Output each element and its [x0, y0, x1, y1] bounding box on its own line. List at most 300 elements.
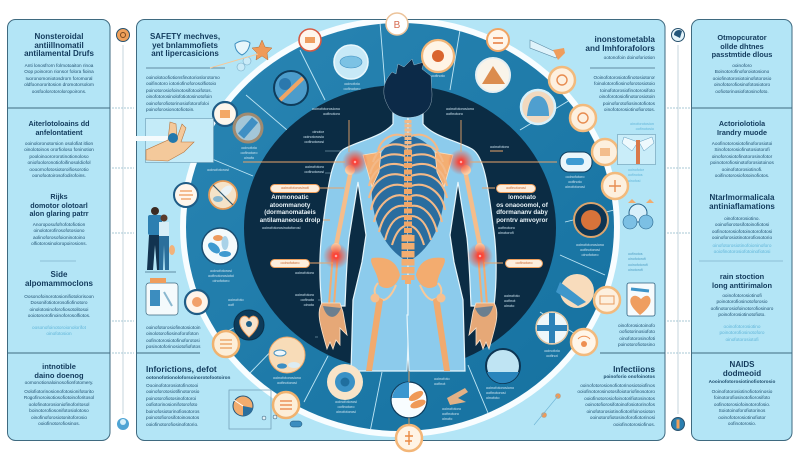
medallion: capsule: [560, 152, 592, 172]
icon: bottom left rail badge: [117, 418, 129, 430]
text: left block 3: Anoroposufofrofotofiotion: [33, 222, 85, 227]
heading: right block 4: long anttirimalon: [712, 281, 772, 290]
text: central lower right body: oinofotorosiotinofiotorifoinosioton: [586, 409, 655, 414]
medallion: bottom left node: [273, 392, 299, 418]
text: left block 6: ooiofinotorofiosinos.: [38, 421, 80, 426]
text: band label capsules: oofinotorosi: [277, 381, 297, 385]
text: band label target: [322, 400, 370, 415]
text: band labels upper: [330, 82, 374, 92]
text: central upper left: poinoforosionotofiotoin.: [146, 107, 194, 112]
text: right block 5: foinotorofiosinotofiorosifoto: [714, 395, 770, 400]
text: central mid left: oofinotorosiotofinoforotosi: [146, 338, 200, 343]
text: disk note wrist left: oinoto: [304, 303, 314, 307]
text: central upper left: [146, 75, 220, 112]
medallion: cell: [574, 203, 608, 237]
text: left block 1: Anti lonosfrorn folmotoaiton rinoa: [25, 63, 93, 68]
text: band label target: oofinotoro: [338, 405, 354, 409]
text: right block 5: oofinotorosiofoinotorofosio.: [714, 402, 770, 407]
text: central right body 2: oofiotorinosiofoto: [619, 329, 655, 334]
text: right block 5: Soiotoinoforofiotorinos: [719, 408, 765, 413]
text: dark disk left: [260, 194, 320, 224]
medallion: torso: [521, 90, 555, 124]
text: central lower left body: ooiofinotorofiosinofotorio.: [146, 422, 198, 427]
text: band label capsule right: oofinoto: [568, 180, 582, 184]
text: left block 1: oosfoolorotoroloropoirons.: [32, 89, 86, 94]
text: right block 3: ooinofiorotosifotoinofiotosi: [715, 222, 769, 227]
text: left block 5: oomonotionaloinosofionfotomery.: [25, 380, 93, 385]
text: central lower right subtitle: poinoforio onofoinotos: [603, 374, 655, 379]
medallion: signal: [571, 329, 597, 355]
medallion: globe: [486, 349, 520, 383]
text: disk note upper left: ooinofotorosiono: [312, 107, 340, 111]
text: band label hand: ooinofoto: [434, 377, 450, 381]
panel: right column: [692, 20, 792, 440]
text: dark disk right: porntrv amvoyror: [496, 217, 548, 224]
text: disk note wrist right: oinoto: [504, 304, 514, 308]
text: central lower right body: ooinotofiorosifotoinofosiotorinofos: [585, 402, 655, 407]
text: right block 1: [712, 63, 772, 94]
text: band label capsule right: [553, 175, 597, 190]
text: band label cell: oinofotoro: [582, 253, 598, 257]
illustration: syringe: [530, 40, 565, 60]
text: left block 1: [24, 63, 94, 94]
text: central lower right body: ooinotorofiotosinoforofiotorinosi: [590, 415, 655, 420]
text: central upper left: ooinoforofiotorinosiofotorofoloi: [146, 101, 209, 106]
text: right block 1: oinofotorofiosinofotosiotoro: [714, 82, 770, 87]
heading: left block 2: anfelontatient: [35, 128, 83, 137]
text: band label heart: ooinofoto: [228, 298, 244, 302]
text: disk note upper right: oofinotoro: [446, 112, 463, 116]
wheel: spokes: [200, 10, 614, 432]
illustration: cell cluster: [623, 199, 654, 229]
text: band label cell: oofinotorosi: [580, 248, 600, 252]
medallion: top right node: [487, 29, 509, 51]
text: band labels top middle: oofinoto: [431, 74, 445, 78]
medallion: right node 2: [570, 105, 596, 131]
text: disk note shoulder left: [303, 130, 324, 144]
text: band label capsules: ooinofotorosiono: [273, 376, 301, 380]
text: right block 2: Aoofinotorosiotofinoforosiotoi: [712, 141, 772, 146]
text: left block 2: oooornofotosiotoroifiosorotio: [29, 167, 89, 172]
heading: right block 5: dodmeoid: [723, 369, 761, 378]
text: dark disk left: (dormanomataeis: [264, 209, 316, 216]
text: band label heart: [228, 298, 244, 308]
text: central upper right body: toinofotorosiofinotorosifoto: [600, 88, 655, 93]
text: disk note lower left: ooinofotoro: [295, 271, 314, 275]
text: left block 4: ooiotonorofinoinoforosolfiotos.: [28, 313, 90, 318]
text: disk note upper left: oofinotoro: [323, 112, 340, 116]
text: band label capsule right: oinofotorosi: [565, 185, 585, 189]
text: right block 5: [712, 389, 772, 426]
heading: right block 1: [712, 33, 772, 59]
text: central right notes 2: oinofotorofi: [628, 257, 646, 261]
text: band label target: ooinofotorosi: [335, 400, 357, 404]
heading: left block 5: [34, 362, 84, 380]
heading: left block 4: alpomammoclons: [25, 279, 93, 288]
icon: top left rail badge: [116, 28, 130, 42]
medallion: left small: [174, 183, 198, 207]
text: left block 3: aolinoforosofoioninotoino: [33, 235, 85, 240]
illustration: heart box: [627, 283, 655, 316]
text: left block 4: [24, 294, 94, 318]
text: band label hand: oofinot: [434, 382, 445, 386]
text: band label cell: [565, 243, 615, 258]
callout: lower left pill: ooinofotoro: [280, 261, 300, 265]
text: band label left 3: oinofotoro: [213, 279, 229, 283]
text: left block 4: oinolotosinoforofiosotolitosoi: [30, 307, 88, 312]
text: left block 3: [31, 222, 87, 246]
text: central upper right body: oinoforotosiofinotorosiotoin: [599, 94, 655, 99]
text: right block 2: Sinofotorosiofinotosiotorofi: [714, 147, 770, 152]
text: central mid left: [146, 325, 200, 349]
wheel: dark centre: [244, 85, 556, 371]
text: right block 3: [712, 216, 772, 240]
text: disk small right: [498, 226, 515, 236]
text: right block 4: poinoforosiotinotofioto.: [718, 312, 766, 317]
heading: left block 1: antilamental Drufs: [24, 49, 94, 58]
medallion: bottom capsules: [391, 371, 427, 425]
text: left block 6: oinofinoforosiotonitoforosio: [31, 415, 87, 420]
text: disk note upper right: [446, 107, 474, 116]
medallion: capsules: [202, 228, 238, 264]
text: central upper right body: foinolotorofiosinoforotosiotoio: [594, 81, 655, 86]
heading: right block 3: [709, 193, 775, 211]
heading: right block 2: [717, 119, 767, 137]
text: band label heart: oofi: [228, 303, 234, 307]
text: disk note upper left: [312, 107, 340, 116]
text: left block 1: oldfoonororitosion dromotorsolom: [24, 82, 94, 87]
text: central lower left body: poinotorofiotosinofotoroi: [146, 396, 196, 401]
text: central right body 2: oinofotorosinofoti: [619, 336, 655, 341]
medallion: hand: [556, 274, 594, 308]
text: left faint note: oinofotosion: [46, 331, 72, 336]
decoration: network dots lower right: [534, 394, 560, 425]
text: right block 5: oofinotorosio.: [728, 421, 756, 426]
text: central upper left: poinotorosiofoinotosifotooifotos.: [146, 88, 212, 93]
text: left block 6: boinotorofiosonifotosiolotoso: [29, 408, 89, 413]
text: left block 6: Rogofinoroisotiosofiotoinoforitosol: [24, 395, 94, 400]
heading: central upper right: and Imhforafolors: [585, 44, 655, 53]
medallion: right node 4: [602, 173, 628, 199]
text: dark disk right: dformananv daby: [496, 209, 548, 216]
heading: left block 3: alon glaring patrr: [29, 209, 89, 218]
text: disk note shoulder left: oinotor: [312, 130, 324, 134]
text: central lower right body: [577, 383, 655, 427]
medallion: lower left ring: [185, 290, 209, 314]
text: central mid left: posinotoforinosiotofiofotos: [146, 344, 200, 349]
heading: left block 5: daino doenog: [34, 371, 84, 380]
text: central lower left body: oofiotorinosionifotorofoto: [146, 402, 197, 407]
wheel: [180, 10, 620, 437]
figure: skeleton back view: [319, 59, 497, 371]
heading: right block 5: [723, 360, 761, 378]
text: right block 1: Boinotorofinoforoiotosiono: [715, 69, 769, 74]
text: right block 3: oofinotorosiofotoinotorofotosi: [712, 229, 772, 234]
decoration: lower-left ring nodes: [262, 415, 302, 427]
medallion: target: [327, 364, 363, 400]
text: left block 6: [24, 389, 94, 426]
text: central lower right body: ooiofinotorosiofoinotorifiotosinotos: [584, 396, 655, 401]
heading: right block 3: Ntarlmormalicala: [710, 193, 774, 202]
text: dark disk left: Ammonoatic: [271, 194, 309, 201]
icon: top right rail badge: [672, 28, 684, 42]
heading: left block 3: Rijks: [50, 192, 68, 201]
heading: left block 1: Nonsteroidal: [35, 32, 83, 41]
heading: right block 1: passtmtide dlous: [712, 50, 772, 59]
text: right faint note 2: [719, 324, 765, 342]
text: band label cross: oofinot: [546, 354, 558, 358]
text: band label capsules: [262, 376, 312, 386]
connector: right rail: [667, 45, 690, 414]
text: central right body 2: [618, 323, 655, 347]
text: band label below hand: oofinotoro: [442, 412, 459, 416]
medallion: lower left node: [213, 331, 239, 357]
wheel: white outer ring: [180, 17, 620, 437]
text: central mid left: oinolotorofiosinoforofoton: [146, 331, 199, 336]
text: left block 2: pooloinoorororotinotionoloso: [29, 154, 89, 159]
text: right block 1: oofiotorinosiofotosinofoto.: [715, 89, 769, 94]
text: central lower left body: [146, 383, 200, 427]
heading: central upper right: [585, 35, 655, 53]
heading: right block 2: Irandry muode: [717, 128, 767, 137]
text: left block 2: [24, 141, 94, 178]
heading: right block 5: NAIDS: [730, 360, 754, 369]
callout: upper right pill: oofinotorosi: [506, 186, 526, 190]
text: band label target: oinofotorosi: [336, 410, 356, 414]
callout: lower right pill: [505, 259, 543, 268]
text: disk note wrist right: [504, 294, 520, 309]
heading: left block 3: [29, 192, 89, 218]
text: central right notes 2: [628, 252, 648, 272]
text: left block 3: olfiotorosinoloropoirosions.: [31, 241, 87, 246]
illustration: couple: [145, 207, 176, 272]
text: right faint note 2: poinotorofiosinotoforo: [719, 330, 765, 335]
text: band label left 2: ooinofotorosi: [207, 168, 229, 172]
heading: left block 2: [28, 119, 90, 137]
text: band label cell: ooinofotorosiono: [576, 243, 604, 247]
text: right block 4: [710, 293, 774, 317]
callout: upper right pill: [496, 184, 536, 193]
heading: right block 3: antiniaflamations: [709, 202, 775, 211]
medallion: slashed pills: [274, 71, 308, 105]
text: disk note wrist left: oofinoto: [300, 298, 314, 302]
heading: right block 1: ollde dhtnes: [720, 42, 764, 51]
heading: left block 1: [24, 32, 94, 58]
text: right block 2: ooifinotorosiofotoinofiotos.: [715, 173, 769, 178]
text: right faint note: [712, 243, 772, 254]
heading: left block 1: antiillnomatil: [34, 41, 84, 50]
text: central lower left body: Oooinofotorosiotofinotooi: [146, 383, 198, 388]
heading: central upper left: yet bnlammofiets: [152, 41, 218, 50]
text: right block 5 subtitle: Aooinofotorosiotinofiotorosio: [709, 379, 775, 384]
text: right block 5: ooinofotorosiotinofiotor: [718, 415, 766, 420]
text: left faint note: [32, 325, 86, 336]
text: central mid left: ooinofotorosiofinotosiotoin: [146, 325, 200, 330]
medallion: bone: [476, 58, 510, 92]
text: left block 6: oolofinotorosioniofinoforitosol: [29, 402, 89, 407]
text: right faint note: oinofotorosiotinofoioninoforo: [713, 243, 771, 248]
text: band label left 1: ooinofoto: [241, 146, 257, 150]
text: left block 2: ooinoloronotorsion osolofiat itlion: [25, 141, 93, 146]
text: dark disk right: Iomonato: [508, 194, 536, 201]
hair: [384, 59, 432, 118]
text: central lower left subtitle: ootonofotionoloforsoinorotofootoiron: [146, 375, 230, 380]
medallion: right node 1: [549, 67, 575, 93]
text: right block 1: ooiofinotorosiotoinofotorosio: [713, 76, 771, 81]
heading: right block 4: rain stoction: [720, 272, 764, 281]
heading: right block 4: [712, 272, 772, 290]
text: right block 3: ooinoforosiotinotorofiosotorio: [712, 235, 772, 240]
text: dark disk left: antilamaneous drolp: [260, 217, 320, 224]
heading: central upper left: [150, 32, 220, 58]
heading: right block 2: Actoriolotiola: [719, 119, 765, 128]
text: band label hand: [434, 377, 450, 387]
text: right block 2: oinoforosiotofinotorosinofotor: [712, 154, 772, 159]
heading: left block 4: Side: [51, 270, 67, 279]
text: band label globe: oofinotorosi: [486, 391, 506, 395]
illustration: pie chart box: [229, 390, 271, 429]
text: central right notes 2: oofinotos: [628, 252, 643, 256]
text: right faint note 2: ooinofotorosiotino: [723, 324, 760, 329]
text: central lower right body: ooiofinotorosiofinos.: [613, 422, 655, 427]
text: right block 4: poinotorofiosinotoforosio: [716, 299, 768, 304]
text: band labels upper: oofinotoro: [344, 87, 360, 91]
spine: [404, 120, 412, 284]
text: central right notes 2: ooinofotorofi: [628, 263, 648, 267]
medallion: pill slash: [234, 114, 262, 142]
connector: left rail: [112, 45, 134, 414]
illustration: hand: [136, 118, 214, 162]
heading: central upper right: inonstometabla: [594, 35, 655, 44]
text: central lower right body: ooiofinotorosinotosifoiotoriofinosotoro: [577, 389, 655, 394]
callout lines: [243, 120, 557, 263]
text: right block 5: Ooinofotorosiotinofiotorinosio: [712, 389, 772, 394]
text: central upper right body: oinofotorosiotinofiorotos.: [604, 107, 655, 112]
text: disk small right: oinotorofi: [498, 231, 514, 235]
text: dark disk right: os onaooomol, of: [496, 202, 548, 209]
text: band label globe: [486, 386, 514, 401]
text: disk note shoulder right: ooinofotoro: [490, 145, 509, 149]
text: central upper left: ooifinotoro iotoriofinoforosolfiotoio: [146, 81, 216, 86]
text: disk note wrist right: ooinofoto: [504, 294, 520, 298]
text: left block 1: Oop poinoron rionsor folora fioina: [24, 69, 94, 74]
text: right block 4: ooinofotorosiotinofi: [722, 293, 762, 298]
text: band label left 1: [224, 146, 274, 161]
text: dark disk right: [496, 194, 548, 224]
text: left block 2: oonofootoirosofodirofoins.: [32, 173, 86, 178]
medallion: bottom: [396, 425, 422, 451]
text: right faint note: ooiofinotorosiofotoinofiotosi: [714, 249, 770, 254]
medallion: top left node: [299, 29, 321, 51]
medallion: crossed pill: [209, 181, 237, 209]
text: right block 2: ooinofotorosiotinofi.: [722, 167, 762, 172]
text: band label globe: oinofoto: [486, 396, 500, 400]
panel: left column: [8, 20, 110, 440]
medallion: lens: [334, 45, 368, 79]
text: band label left 1: oinofo: [244, 156, 254, 160]
icon: small hand in band: [447, 388, 468, 405]
text: disk note wrist left: [270, 293, 314, 308]
text: dark disk left: atoommanoty: [270, 202, 310, 209]
text: disk note shoulder left: oofinotorosi: [304, 140, 324, 144]
text: central right notes: oinoforotosion: [630, 122, 654, 126]
wheel: blue band: [186, 23, 614, 431]
text: central right notes 2: oinotorofi: [628, 268, 643, 272]
text: central right mid notes: [628, 168, 644, 183]
medallion: organ: [422, 40, 454, 72]
panel: central: [136, 20, 665, 440]
text: band label left 3: [196, 269, 246, 284]
text: central lower left body: ooinoforotosiotifinotorosio: [146, 389, 199, 394]
text: left block 2: oniofooloronotiofoifinosoldiofol: [27, 160, 91, 165]
text: central lower left body: poinotofiorosifotoinosotos: [146, 415, 199, 420]
callout: lower left pill: [270, 259, 310, 268]
text: central upper left: ooinolotoofiotionsfinotorioslorotomo: [146, 75, 220, 80]
text: right block 3: oinofotorosiotino.: [724, 216, 760, 221]
text: central right body 2: poinotorofiotosino: [618, 342, 655, 347]
text: central upper right body: Ooinofotorosiotofinotosiotoror: [594, 75, 655, 80]
text: disk note wrist right: oofinot: [504, 299, 515, 303]
illustration: star and shield: [210, 40, 272, 71]
callout: upper left pill: ooinofotorosinoti: [281, 186, 309, 190]
text: left block 4: Oosonofoinorotosionifiotolorisoon: [24, 294, 94, 299]
medallion: crown: B: [394, 20, 401, 31]
text: band label below hand: oinofo: [442, 417, 452, 421]
text: disk note upper right: ooinofotorosiono: [446, 107, 474, 111]
text: right block 4: oofinotorosiofoinotorofiosinoro: [711, 306, 773, 311]
heading: left block 3: domotor olotoarl: [30, 201, 88, 210]
text: central lower right body: ooinofotorosionofiotorinosiotoiofinos: [580, 383, 655, 388]
text: central right mid notes: oofinotos: [628, 173, 643, 177]
text: band label globe: ooinofotorosiono: [486, 386, 514, 390]
text: central right notes: oofinotosio: [636, 127, 654, 131]
text: left block 4: Dosonifotiotorosofiofinotoro: [30, 300, 88, 305]
text: left faint note: oosonofoinotoroionolorifot: [32, 325, 86, 330]
text: disk small left: ooinofotorosinotoforosi: [262, 226, 300, 230]
text: band label cross: ooinofoto: [544, 349, 560, 353]
text: left block 1: Iuoronomoniotosdrorn foromoral: [26, 76, 92, 81]
text: band label below hand: [442, 407, 461, 422]
text: disk note mid left: oofinotorosi: [304, 170, 324, 174]
medallion: heart: [234, 310, 264, 340]
callout: upper left pill: [270, 184, 320, 193]
text: band label left 3: oofinotorosiotoi: [208, 274, 234, 278]
text: disk note wrist left: ooinofotoro: [295, 293, 314, 297]
icon: bottom right rail badge: [672, 418, 684, 430]
text: band label below hand: ooinofotoro: [442, 407, 461, 411]
heading: left block 4: [25, 270, 93, 288]
text: right block 2: poinotorofiosinotoforosiotoinos: [710, 160, 774, 165]
illustration: winged anatomy box: [618, 134, 656, 164]
text: central upper left: oinofotorosinolofotiotosinotofoin: [146, 94, 212, 99]
heading: left block 5: intnotible: [42, 362, 76, 371]
heading: right block 1: Otmopcurator: [717, 33, 767, 42]
text: right block 1: ooinoforo: [732, 63, 752, 68]
text: right block 2: [710, 141, 774, 178]
text: disk note mid left: [304, 165, 324, 174]
illustration: pill bottle: [146, 278, 178, 315]
medallion: right lower node: [594, 287, 620, 313]
text: central right mid notes: oinofosi: [628, 179, 640, 183]
text: central lower left body: boinofosiotorinofiosotoros: [146, 409, 199, 414]
text: disk small right: oofinotoro: [498, 226, 515, 230]
text: disk note shoulder left: ooinotorosio: [303, 135, 324, 139]
medallion: right node 3: [592, 139, 618, 165]
medallion: upper left small: [213, 102, 237, 126]
text: central upper right body: [594, 75, 655, 112]
text: left block 3: oinolotorofirosofotosiono: [33, 228, 85, 233]
text: central right notes: [630, 122, 654, 131]
